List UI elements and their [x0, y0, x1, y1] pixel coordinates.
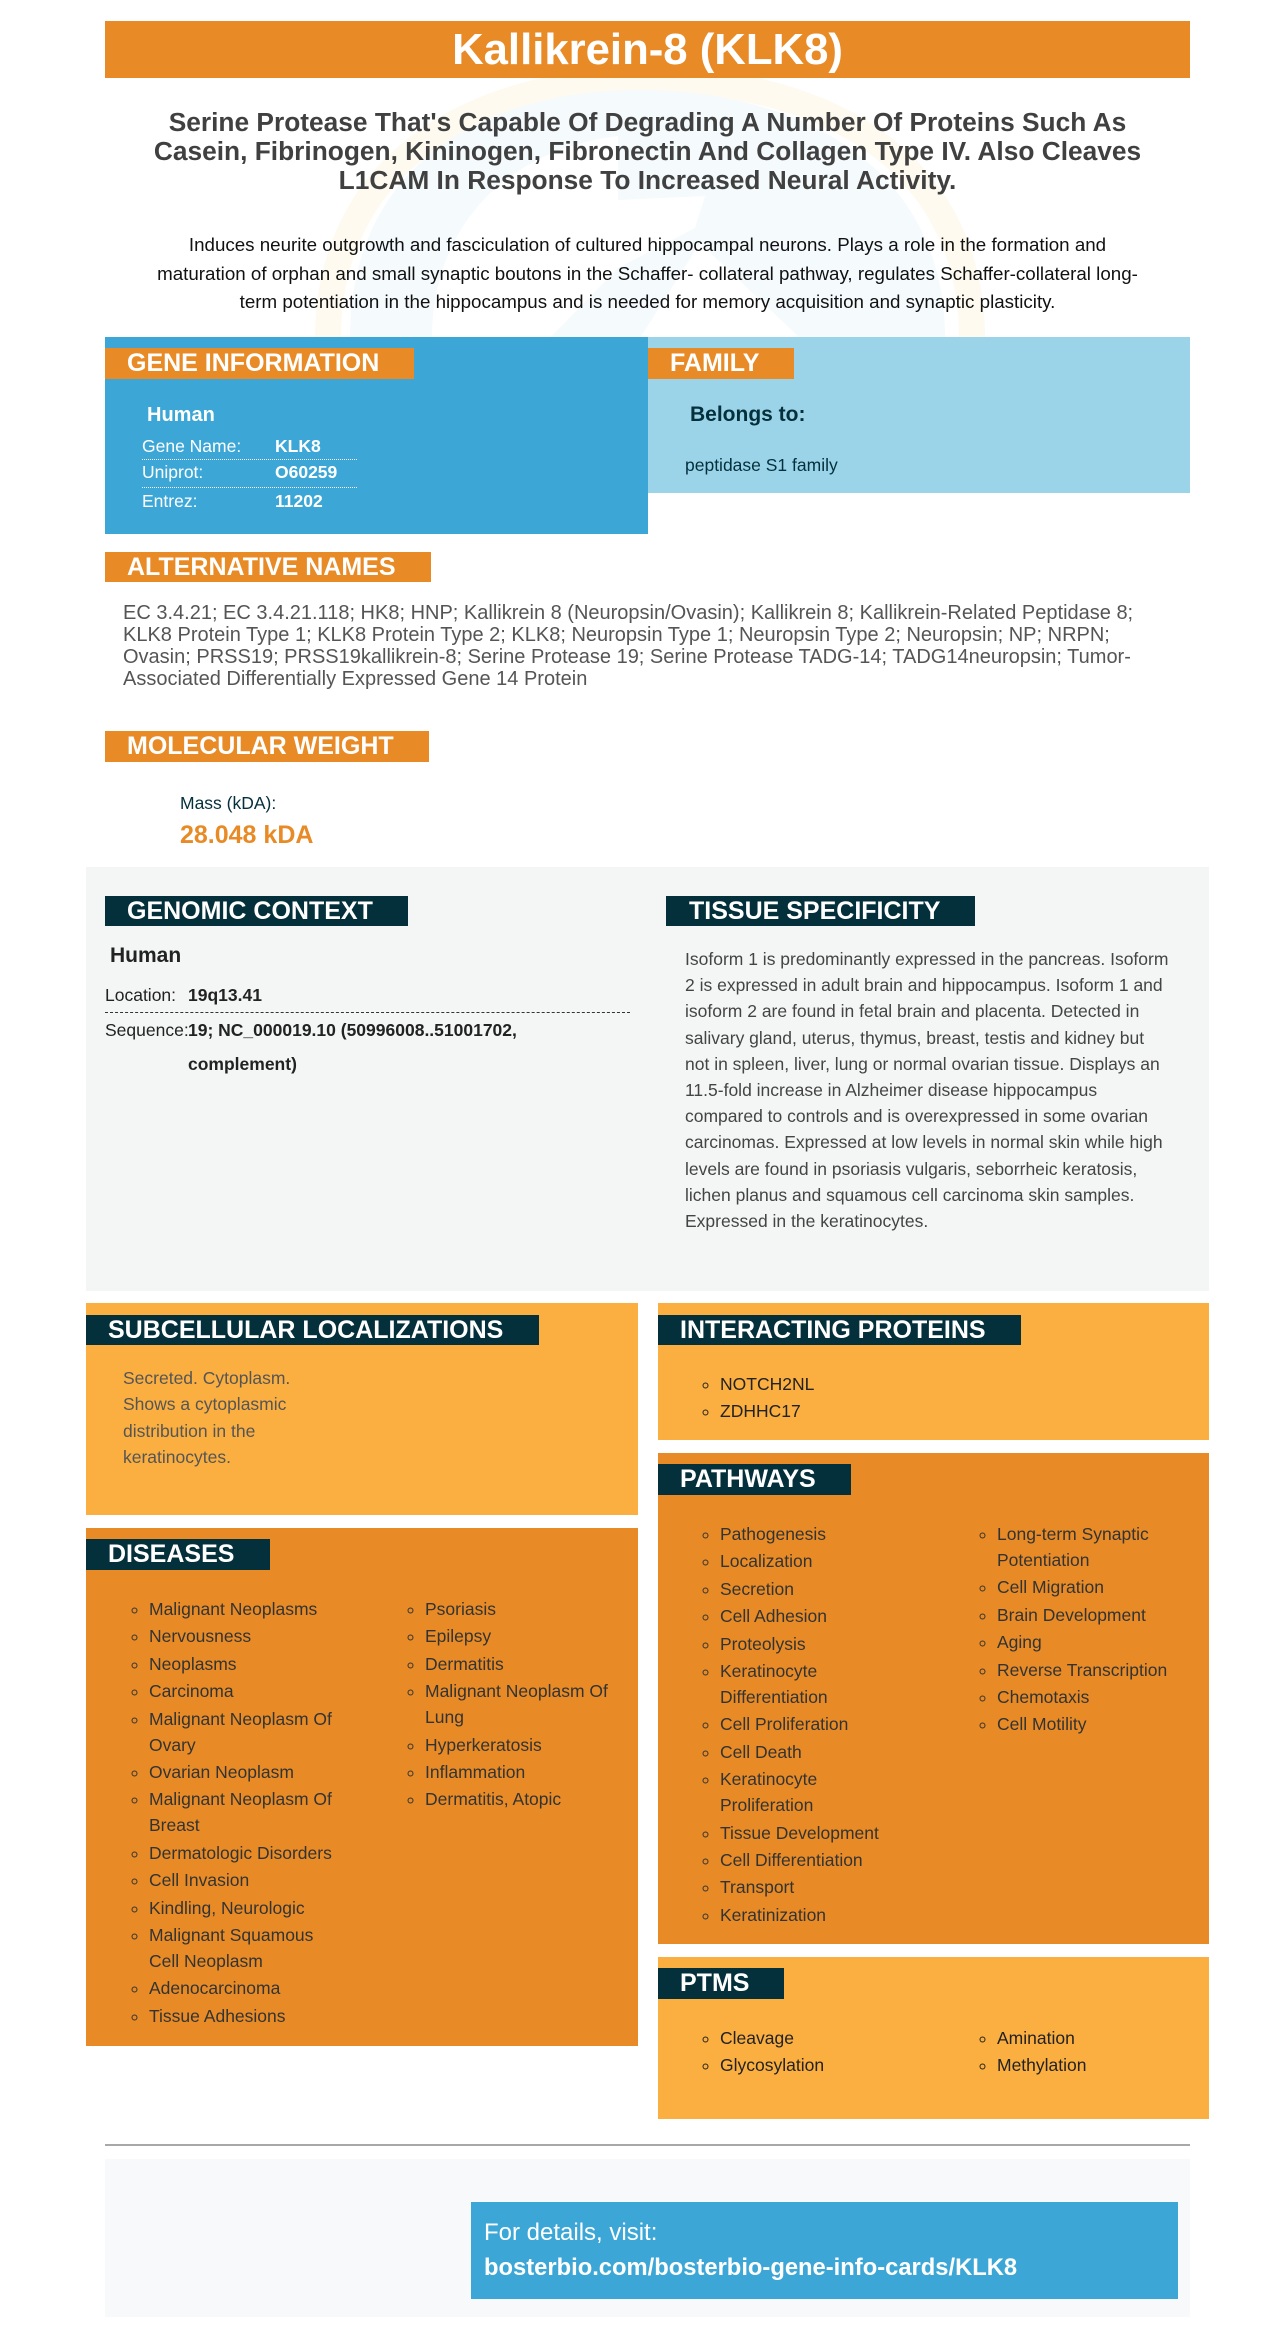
genomic location row: 19q13.41 — [188, 985, 262, 1005]
diseases list column 1: Breast — [149, 1815, 200, 1835]
pathways list column 1: Proteolysis — [720, 1634, 806, 1654]
pathways list column 2: Long-term Synaptic — [997, 1524, 1149, 1544]
pathways list column 1: Keratinocyte — [720, 1661, 817, 1681]
panel: family — [648, 337, 1190, 493]
pathways list column 1: Proliferation — [720, 1795, 813, 1815]
panel: footer — [105, 2159, 1190, 2317]
entrez row: 11202 — [275, 491, 323, 511]
entrez row: Entrez: — [142, 491, 197, 511]
title — [105, 21, 1190, 78]
details label: For details, visit: — [484, 2219, 657, 2246]
pathways list column 1: Differentiation — [720, 1687, 828, 1707]
diseases list column 1: Tissue Adhesions — [149, 2006, 286, 2026]
ptms list column 1: Cleavage — [720, 2028, 794, 2048]
tissue specificity text: Isoform 1 is predominantly expressed in the pancreas. Isoform — [685, 949, 1168, 969]
diseases list column 1: Nervousness — [149, 1626, 251, 1646]
callout: details link — [471, 2202, 1178, 2299]
pathways list column 2: Cell Motility — [997, 1714, 1086, 1734]
ptms list column 2: Amination — [997, 2028, 1075, 2048]
heading: subcellular localizations: SUBCELLULAR LOCALIZATIONS — [108, 1316, 503, 1344]
pathways list column 1: Cell Proliferation — [720, 1714, 848, 1734]
interacting proteins list — [702, 1374, 814, 1421]
pathways list column 2: Aging — [997, 1632, 1042, 1652]
heading: interacting proteins: INTERACTING PROTEINS — [680, 1316, 986, 1344]
gene name row: KLK8 — [275, 436, 321, 456]
subtitle: Serine Protease That's Capable Of Degrading A Number Of Proteins Such As — [169, 107, 1126, 137]
diseases list column 1: Cell Neoplasm — [149, 1951, 263, 1971]
pathways list column 2: Brain Development — [997, 1605, 1146, 1625]
panel: interacting proteins — [658, 1303, 1209, 1440]
diseases list column 2: Lung — [425, 1707, 464, 1727]
tissue specificity text: carcinomas. Expressed at low levels in normal skin while high — [685, 1132, 1163, 1152]
pathways list column 1: Secretion — [720, 1579, 794, 1599]
diseases list column 2 — [408, 1599, 608, 1809]
pathways list column 1: Transport — [720, 1877, 794, 1897]
subcellular text: Shows a cytoplasmic — [123, 1394, 286, 1414]
subtitle: L1CAM In Response To Increased Neural Activity. — [339, 165, 956, 195]
genomic location row: Location: — [105, 985, 176, 1005]
pathways list column 1: Tissue Development — [720, 1823, 879, 1843]
pathways list column 1: Localization — [720, 1551, 812, 1571]
ptms list column 2 — [980, 2028, 1086, 2075]
description: term potentiation in the hippocampus and is needed for memory acquisition and synaptic plasticity. — [240, 291, 1055, 312]
heading: diseases: DISEASES — [108, 1540, 234, 1568]
tissue specificity text: compared to controls and is overexpressed in some ovarian — [685, 1106, 1148, 1126]
description: maturation of orphan and small synaptic boutons in the Schaffer- collateral pathway, regulates Schaffer-collateral long- — [157, 263, 1138, 284]
details url: bosterbio.com/bosterbio-gene-info-cards/KLK8 — [484, 2254, 1017, 2281]
diseases list column 2: Epilepsy — [425, 1626, 491, 1646]
pathways list column 2: Cell Migration — [997, 1577, 1104, 1597]
genomic sequence row: Sequence: — [105, 1020, 189, 1040]
diseases list column 2: Dermatitis — [425, 1654, 504, 1674]
belongs to label: Belongs to: — [690, 403, 806, 426]
alternative names text: EC 3.4.21; EC 3.4.21.118; HK8; HNP; Kallikrein 8 (Neuropsin/Ovasin); Kallikrein 8; Kallikrein-Related Peptidase 8; — [123, 602, 1133, 624]
diseases list column 1: Ovarian Neoplasm — [149, 1762, 294, 1782]
pathways list column 1: Cell Adhesion — [720, 1606, 827, 1626]
subtitle — [154, 107, 1141, 195]
heading: gene information: GENE INFORMATION — [127, 349, 379, 377]
diseases list column 1 — [132, 1599, 332, 2026]
pathways list column 2: Potentiation — [997, 1550, 1089, 1570]
panel: ptms — [658, 1957, 1209, 2119]
ptms list column 2: Methylation — [997, 2055, 1086, 2075]
diseases list column 1: Malignant Squamous — [149, 1925, 313, 1945]
subtitle: Casein, Fibrinogen, Kininogen, Fibronectin And Collagen Type IV. Also Cleaves — [154, 136, 1141, 166]
panel: pathways — [658, 1453, 1209, 1944]
pathways list column 1: Cell Death — [720, 1742, 802, 1762]
heading: family — [648, 348, 794, 379]
interacting proteins list: ZDHHC17 — [720, 1401, 801, 1421]
subcellular text — [123, 1368, 290, 1467]
species label: Human — [147, 404, 215, 426]
genomic species label: Human — [110, 944, 181, 967]
tissue specificity text: salivary gland, uterus, thymus, breast, testis and kidney but — [685, 1028, 1144, 1048]
tissue specificity text: Expressed in the keratinocytes. — [685, 1211, 928, 1231]
diseases list column 1: Malignant Neoplasm Of — [149, 1789, 332, 1809]
alternative names text: Associated Differentially Expressed Gene 14 Protein — [123, 668, 587, 690]
diseases list column 1: Adenocarcinoma — [149, 1978, 280, 1998]
subcellular text: keratinocytes. — [123, 1447, 231, 1467]
description — [157, 234, 1138, 312]
heading: ptms: PTMS — [680, 1969, 749, 1997]
diseases list column 1: Cell Invasion — [149, 1870, 249, 1890]
diseases list column 1: Neoplasms — [149, 1654, 237, 1674]
diseases list column 1: Dermatologic Disorders — [149, 1843, 332, 1863]
entrez row — [142, 491, 323, 511]
mass label: Mass (kDA): — [180, 793, 276, 813]
interacting proteins list: NOTCH2NL — [720, 1374, 814, 1394]
ptms list column 1 — [702, 2028, 824, 2075]
pathways list column 1: Keratinocyte — [720, 1769, 817, 1789]
tissue specificity text: lichen planus and squamous cell carcinoma skin samples. — [685, 1185, 1134, 1205]
alternative names text — [123, 602, 1133, 690]
diseases list column 1: Malignant Neoplasms — [149, 1599, 317, 1619]
alternative names text: KLK8 Protein Type 1; KLK8 Protein Type 2; KLK8; Neuropsin Type 1; Neuropsin Type 2; Neuropsin; NP; NRPN; — [123, 624, 1110, 646]
genomic location row — [105, 984, 630, 1013]
heading: genomic context: GENOMIC CONTEXT — [127, 897, 373, 925]
uniprot row: Uniprot: — [142, 462, 203, 482]
diseases list column 2: Psoriasis — [425, 1599, 496, 1619]
gene name row: Gene Name: — [142, 436, 241, 456]
ptms list column 1: Glycosylation — [720, 2055, 824, 2075]
diseases list column 2: Malignant Neoplasm Of — [425, 1681, 608, 1701]
panel: subcellular localizations — [86, 1303, 638, 1515]
uniprot row: O60259 — [275, 462, 337, 482]
pathways list column 1: Pathogenesis — [720, 1524, 826, 1544]
diseases list column 1: Carcinoma — [149, 1681, 234, 1701]
diseases list column 1: Ovary — [149, 1735, 196, 1755]
background watermark logo — [315, 78, 985, 337]
text: 19; NC_000019.10 (50996008..51001702, — [188, 1020, 517, 1040]
heading: alternative names: ALTERNATIVE NAMES — [127, 553, 396, 581]
mass value: 28.048 kDA — [180, 821, 313, 849]
heading: pathways — [658, 1464, 851, 1495]
diseases list column 2: Hyperkeratosis — [425, 1735, 542, 1755]
tissue specificity text: isoform 2 are found in fetal brain and placenta. Detected in — [685, 1001, 1139, 1021]
description: Induces neurite outgrowth and fasciculation of cultured hippocampal neurons. Plays a role in the formation and — [189, 234, 1106, 255]
heading: tissue specificity: TISSUE SPECIFICITY — [689, 897, 940, 925]
pathways list column 1: Keratinization — [720, 1905, 826, 1925]
alternative names text: Ovasin; PRSS19; PRSS19kallikrein-8; Serine Protease 19; Serine Protease TADG-14; TADG14neuropsin; Tumor- — [123, 646, 1131, 668]
tissue specificity text: levels are found in psoriasis vulgaris, seborrheic keratosis, — [685, 1159, 1137, 1179]
subcellular text: Secreted. Cytoplasm. — [123, 1368, 290, 1388]
heading: pathways: PATHWAYS — [680, 1465, 816, 1493]
panel: diseases — [86, 1528, 638, 2046]
heading: diseases — [86, 1539, 270, 1570]
subcellular text: distribution in the — [123, 1421, 255, 1441]
panel: gene information — [105, 337, 648, 534]
uniprot row — [142, 461, 357, 488]
tissue specificity text: 2 is expressed in adult brain and hippocampus. Isoform 1 and — [685, 975, 1163, 995]
pathways list column 1 — [702, 1524, 879, 1925]
text: complement) — [188, 1054, 297, 1074]
family value: peptidase S1 family — [685, 455, 838, 475]
tissue specificity text: 11.5-fold increase in Alzheimer disease hippocampus — [685, 1080, 1097, 1100]
diseases list column 1: Kindling, Neurologic — [149, 1898, 305, 1918]
heading: family: FAMILY — [670, 349, 759, 377]
gene name row — [142, 435, 357, 460]
pathways list column 2: Reverse Transcription — [997, 1660, 1167, 1680]
tissue specificity text: not in spleen, liver, lung or normal ovarian tissue. Displays an — [685, 1054, 1160, 1074]
panel: genomic context and tissue specificity — [86, 867, 1209, 1291]
genomic sequence row — [105, 1020, 517, 1074]
pathways list column 1: Cell Differentiation — [720, 1850, 863, 1870]
pathways list column 2: Chemotaxis — [997, 1687, 1089, 1707]
pathways list column 2 — [980, 1524, 1167, 1734]
diseases list column 2: Inflammation — [425, 1762, 525, 1782]
heading: ptms — [658, 1968, 784, 1999]
heading: molecular weight: MOLECULAR WEIGHT — [127, 732, 394, 760]
diseases list column 2: Dermatitis, Atopic — [425, 1789, 561, 1809]
title: Kallikrein-8 (KLK8) — [452, 25, 843, 74]
tissue specificity text — [685, 949, 1168, 1231]
diseases list column 1: Malignant Neoplasm Of — [149, 1709, 332, 1729]
